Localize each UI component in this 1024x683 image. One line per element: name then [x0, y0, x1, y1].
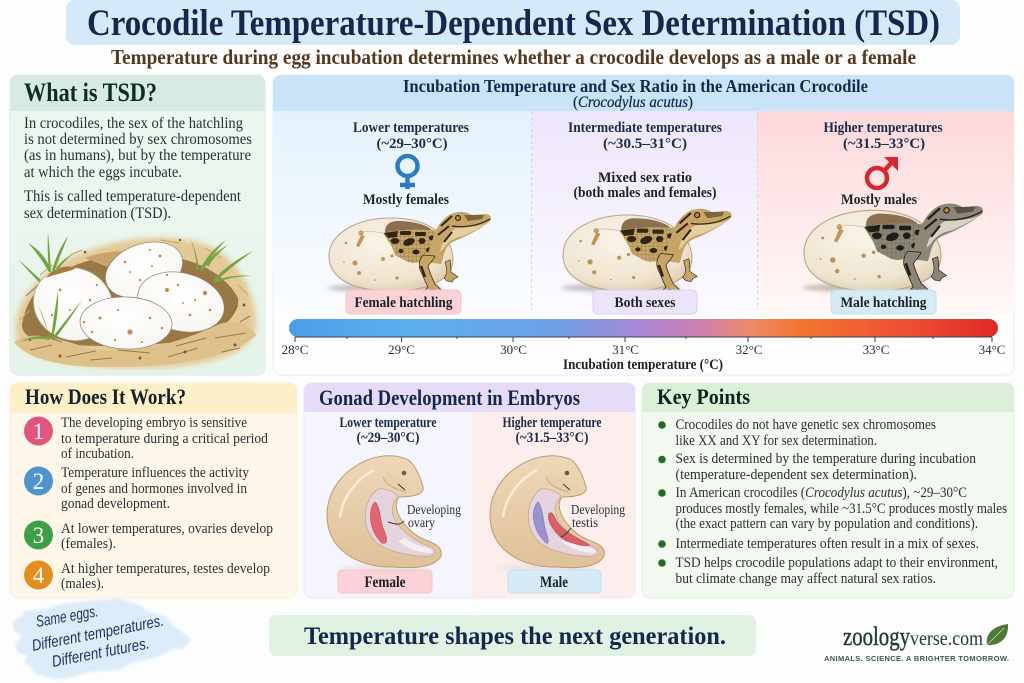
step 2: Temperature influences the activity	[61, 465, 250, 481]
temperature gradient bar	[282, 319, 1005, 373]
panel: key points	[642, 383, 1014, 598]
column: female embryo: (~29–30°C)	[356, 430, 420, 446]
column: male embryo: Higher temperature	[502, 415, 602, 431]
label: developing testis	[571, 503, 625, 531]
axis title: Incubation temperature (°C)	[563, 357, 723, 373]
axis labels: 28°C	[282, 342, 308, 357]
banner: closing message	[269, 615, 756, 656]
chip: male hatchling	[831, 290, 936, 314]
text: TSD definition: at which the eggs incubate.	[24, 164, 182, 181]
text: TSD definition: In crocodiles, the sex of the hatchling	[24, 115, 243, 132]
panel: what is TSD	[10, 75, 265, 375]
column: higher temperatures	[802, 120, 983, 314]
bullet 1: Crocodiles do not have genetic sex chromosomes	[676, 417, 936, 433]
chip: male	[508, 570, 601, 593]
label: mixed sex ratio: Mixed sex ratio	[598, 170, 692, 186]
text: TSD definition: sex determination (TSD).	[24, 205, 171, 222]
heading: gonad development: Gonad Development in Embryos	[319, 385, 580, 410]
label: mixed sex ratio	[574, 170, 716, 201]
text: TSD definition: (as in humans), but by the temperature	[24, 147, 251, 164]
icon: leaf	[987, 624, 1008, 645]
step 3	[24, 520, 273, 552]
illustration: embryo with testis	[490, 456, 604, 571]
text: TSD definition: is not determined by sex chromosomes	[24, 131, 252, 148]
chip: male: Male	[540, 574, 568, 591]
callout: brush note: Same eggs.	[35, 603, 100, 631]
column: male embryo	[490, 415, 625, 593]
column: higher temperatures: Higher temperatures	[824, 120, 943, 136]
illustration: mixed hatchling	[561, 209, 732, 292]
step 2: 2	[33, 469, 44, 494]
column: intermediate temperatures: (~30.5–31°C)	[603, 136, 687, 152]
bullet 1	[658, 417, 936, 449]
callout: brush note: Different temperatures.	[31, 613, 165, 655]
column: male embryo: (~31.5–33°C)	[516, 430, 589, 446]
bullet 2	[658, 451, 977, 483]
logo: zoologyverse.com	[824, 622, 1009, 663]
heading: how does it work: How Does It Work?	[25, 384, 186, 409]
label: developing testis: testis	[572, 516, 598, 531]
title banner: Crocodile Temperature-Dependent Sex Determination (TSD)	[87, 3, 940, 44]
step 4: At higher temperatures, testes develop	[61, 561, 270, 577]
bullet 5: but climate change may affect natural sex ratios.	[676, 571, 936, 587]
axis labels: 29°C	[388, 342, 415, 357]
chart heading: (Crocodylus acutus)	[573, 94, 693, 111]
bullet 3	[658, 485, 1007, 532]
logo: zoologyverse.com: verse.com	[910, 626, 983, 650]
bullet 2: (temperature-dependent sex determination).	[676, 467, 917, 483]
label: mixed sex ratio: (both males and females)	[574, 185, 716, 201]
bullet 4: Intermediate temperatures often result in a mix of sexes.	[676, 536, 979, 552]
chip: female hatchling	[346, 290, 461, 314]
chip: female hatchling: Female hatchling	[354, 295, 453, 311]
column: lower temperatures: (~29–30°C)	[376, 136, 448, 152]
step 1: 1	[33, 419, 44, 444]
label: developing ovary: Developing	[407, 503, 461, 518]
logo: zoologyverse.com: ANIMALS. SCIENCE. A BRIGHTER TOMORROW.	[824, 654, 1009, 663]
illustration: male hatchling	[802, 204, 983, 292]
chart heading	[403, 76, 868, 111]
label: developing testis: Developing	[571, 503, 625, 518]
step 1: to temperature during a critical period	[61, 431, 269, 447]
bullet 5	[658, 555, 998, 587]
subtitle: Temperature during egg incubation determines whether a crocodile develops as a male or a female	[111, 45, 916, 69]
bullet 1: like XX and XY for sex determination.	[676, 433, 877, 449]
bullet 3: In American crocodiles (Crocodylus acutus), ~29–30°C	[676, 485, 967, 501]
step 1: of incubation.	[61, 446, 134, 462]
chip: female: Female	[364, 574, 406, 591]
chip: both sexes	[593, 290, 697, 314]
step 4: 4	[33, 563, 45, 588]
bullet 3: (the exact pattern can vary by population and conditions).	[676, 516, 978, 532]
banner: closing message: Temperature shapes the next generation.	[304, 623, 726, 650]
callout: brush note: Different futures.	[51, 635, 151, 671]
column: lower temperatures	[327, 120, 491, 314]
column: higher temperatures: (~31.5–33°C)	[843, 136, 925, 152]
label: mostly females: Mostly females	[363, 192, 449, 208]
step 3: 3	[33, 523, 44, 548]
icon: female symbol	[398, 156, 418, 189]
column: lower temperatures: Lower temperatures	[353, 120, 469, 136]
step 2	[24, 465, 250, 512]
axis labels: 30°C	[500, 342, 527, 357]
heading: what is TSD: What is TSD?	[24, 78, 157, 107]
step 2: gonad development.	[61, 496, 170, 512]
column backgrounds	[273, 111, 1014, 315]
chart heading: Incubation Temperature and Sex Ratio in the American Crocodile	[403, 76, 868, 96]
axis labels	[282, 342, 1005, 357]
step 1	[24, 415, 269, 462]
panel: incubation temperature and sex ratio	[273, 75, 1014, 375]
text: TSD definition	[24, 115, 252, 222]
label: developing ovary: ovary	[408, 516, 435, 531]
axis labels: 32°C	[736, 342, 762, 357]
column: female embryo: Lower temperature	[340, 415, 437, 431]
panel: gonad development	[304, 383, 635, 598]
step 2: of genes and hormones involved in	[61, 481, 248, 497]
axis labels: 31°C	[612, 342, 639, 357]
axis labels: 34°C	[979, 342, 1005, 357]
illustration: embryo with ovary	[327, 456, 441, 571]
chip: male hatchling: Male hatchling	[840, 295, 927, 311]
text: TSD definition: This is called temperature-dependent	[24, 188, 242, 205]
illustration: eggs in nest	[14, 232, 256, 368]
column: female embryo	[327, 415, 461, 593]
column: intermediate temperatures: Intermediate temperatures	[568, 120, 722, 136]
chip: both sexes: Both sexes	[614, 295, 676, 311]
column: intermediate temperatures	[561, 120, 732, 314]
step 3: At lower temperatures, ovaries develop	[61, 521, 273, 537]
step 4: (males).	[61, 576, 104, 592]
heading: key points: Key Points	[657, 384, 750, 409]
step 3: (females).	[61, 536, 116, 552]
callout: brush note	[13, 599, 191, 680]
illustration: female hatchling	[327, 212, 491, 292]
axis labels: 33°C	[863, 342, 889, 357]
icon: male symbol	[867, 157, 898, 188]
bullet 5: TSD helps crocodile populations adapt to their environment,	[676, 555, 998, 571]
bullet 2: Sex is determined by the temperature during incubation	[676, 451, 977, 467]
step 4	[24, 560, 270, 592]
label: developing ovary	[407, 503, 461, 531]
chip: female	[338, 570, 432, 593]
step 1: The developing embryo is sensitive	[61, 415, 247, 431]
panel: how does it work	[10, 383, 297, 598]
label: mostly males: Mostly males	[841, 192, 917, 208]
logo: zoologyverse.com: zoology	[843, 622, 910, 651]
